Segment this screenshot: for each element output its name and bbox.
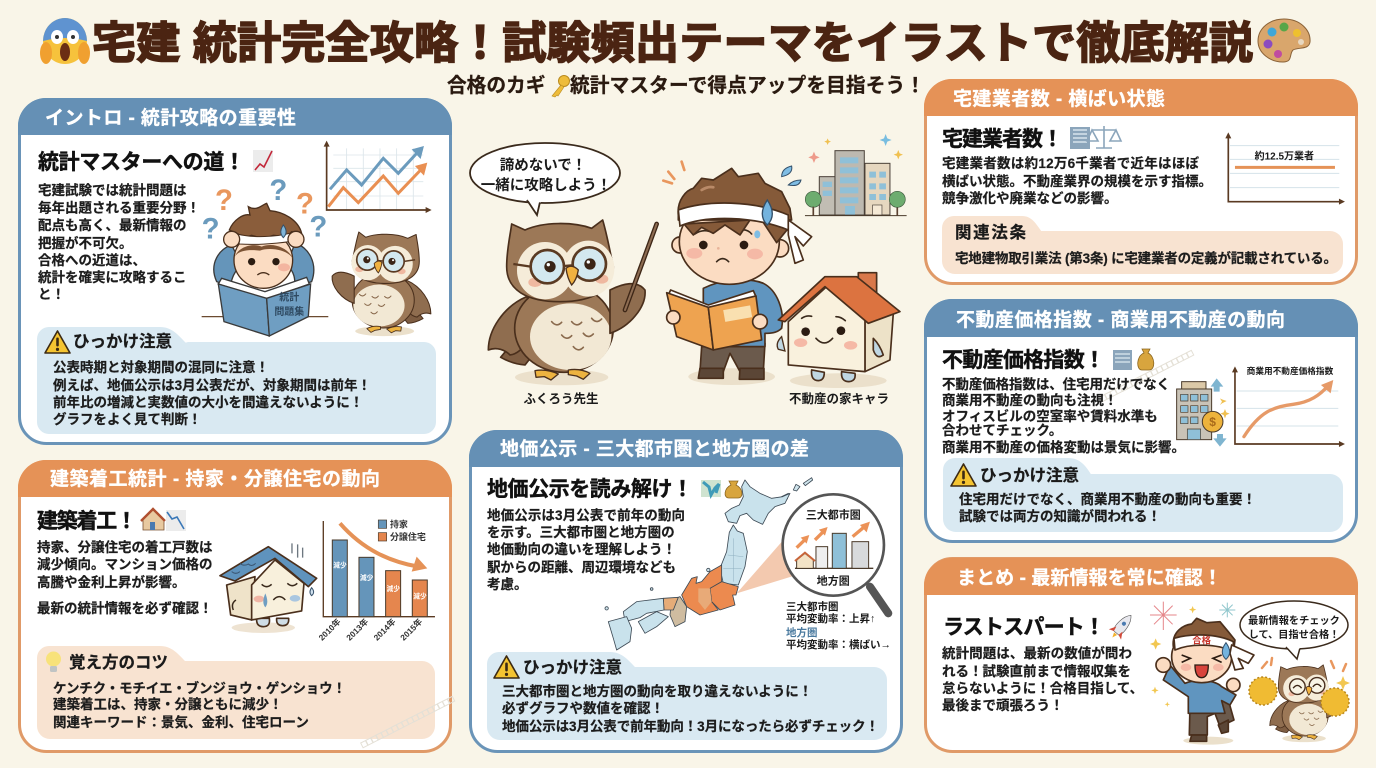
- header: price index: [924, 299, 1358, 337]
- text block: 毎年出題される重要分野！: [38, 200, 200, 216]
- panel: price index: [924, 299, 1358, 542]
- callout: caution: 公表時期と対象期間の混同に注意！: [53, 359, 269, 375]
- callout: related law: 関連法条: [955, 222, 1026, 242]
- text block: 最新の統計情報を必ず確認！: [37, 600, 212, 616]
- text block: 配点も高く、最新情報の: [38, 217, 186, 233]
- header: intro: イントロ - 統計攻略の重要性: [45, 106, 296, 129]
- callout: caution: 試験では両方の知識が問われる！: [959, 508, 1161, 524]
- callout: caution: グラフをよく見て判断！: [53, 411, 202, 427]
- center characters: [470, 134, 907, 406]
- bar chart: 2013年: [344, 616, 370, 643]
- text block: 把握が不可欠。: [38, 235, 132, 251]
- text block: を示す。三大都市圏と地方圏の: [487, 524, 675, 540]
- header: construction: [18, 460, 452, 497]
- callout: caution: [37, 327, 436, 434]
- speech bubble: 一緒に攻略しよう！: [481, 176, 611, 194]
- heading: ラストスパート！: [943, 616, 1105, 639]
- panel: construction: [18, 460, 452, 752]
- panel: summary: [924, 558, 1358, 752]
- callout: caution: 三大都市圏と地方圏の動向を取り違えないように！: [502, 683, 812, 699]
- text: rates: 平均変動率：横ばい→: [786, 638, 891, 651]
- text block: 競争激化や廃業などの影響。: [942, 190, 1118, 206]
- icon: chart up: [253, 150, 273, 172]
- bar chart: [316, 518, 435, 643]
- speech bubble: 諦めないで！: [500, 157, 586, 174]
- text block: オフィスビルの空室率や賃料水準も: [942, 408, 1158, 424]
- text block: 怠らないように！合格目指して、: [942, 680, 1143, 696]
- header: agents: 宅建業者数 - 横ばい状態: [953, 87, 1165, 110]
- illustration: cheering student: [1150, 602, 1254, 745]
- icon: key: [552, 76, 570, 97]
- title: 宅建 統計完全攻略！試験頻出テーマをイラストで徹底解説: [92, 19, 1253, 68]
- text block: 統計を確実に攻略するこ: [38, 269, 186, 285]
- line chart: 約12.5万業者: [1255, 149, 1314, 162]
- illustration: worried student: ?: [215, 184, 233, 217]
- icon: building: [1113, 350, 1132, 370]
- magnifier: [783, 494, 888, 613]
- bar chart: 分譲住宅: [390, 531, 426, 542]
- header: land price: 地価公示 - 三大都市圏と地方圏の差: [500, 437, 809, 460]
- text: rates: 三大都市圏: [786, 600, 838, 613]
- panel: intro: [18, 98, 452, 444]
- callout: memory tip: 関連キーワード：景気、金利、住宅ローン: [53, 714, 309, 730]
- icon: money bag: [1138, 349, 1154, 370]
- illustration: worried student: 問題集: [274, 305, 304, 318]
- bar chart: 2010年: [316, 616, 343, 643]
- illustration: office building and coin: [1177, 378, 1230, 447]
- callout: memory tip: 建築着工は、持家・分譲ともに減少！: [53, 696, 282, 712]
- text block: 駅からの距離、周辺環境なども: [487, 559, 676, 575]
- callout: memory tip: [37, 646, 435, 739]
- illustration: worried student: ?: [309, 211, 327, 244]
- text block: 合わせてチェック。: [942, 423, 1062, 438]
- label: 不動産の家キャラ: [789, 391, 889, 406]
- text block: 商業用不動産の動向も注視！: [942, 392, 1118, 408]
- line chart: 商業用不動産価格指数: [1247, 365, 1334, 376]
- speech bubble: [1240, 601, 1348, 659]
- line chart: [1225, 132, 1345, 205]
- header: summary: [924, 558, 1358, 595]
- subtitle: 合格のカギ: [447, 75, 545, 97]
- text block: 減少傾向。マンション価格の: [37, 556, 212, 572]
- bar chart: 持家: [390, 518, 408, 529]
- callout: related law: 宅地建物取引業法 (第3条) に宅建業者の定義が記載されている。: [955, 250, 1337, 266]
- illustration: owl: [332, 232, 431, 336]
- icon: bulb: [46, 652, 61, 672]
- heading: 統計マスターへの道！: [38, 151, 245, 174]
- illustration: owl teacher: [488, 220, 657, 385]
- speech bubble: して、目指せ合格！: [1249, 628, 1339, 641]
- illustration: sad house: [220, 543, 317, 633]
- icon: chart down: [166, 510, 186, 531]
- icon: building: [1070, 127, 1090, 149]
- callout: related law: [942, 216, 1343, 274]
- panel: agents: [924, 79, 1358, 284]
- bar chart: 減少: [413, 591, 427, 600]
- callout: caution: 例えば、地価公示は3月公表だが、対象期間は前年！: [53, 377, 371, 393]
- illustration: worried student: ?: [202, 212, 220, 245]
- speech bubble: [470, 143, 620, 215]
- watermark: □□□□□□□□□□□□□□□□□□: [1098, 348, 1196, 405]
- text block: 宅建試験では統計問題は: [38, 182, 187, 198]
- icon: scales: [1087, 126, 1121, 148]
- header: intro: [18, 98, 452, 135]
- text block: れる！試験直前まで情報収集を: [942, 663, 1131, 679]
- callout: caution: ひっかけ注意: [73, 332, 172, 351]
- illustration: worried student: [202, 174, 328, 336]
- watermark: □□□□□□□□□□□□□□□□□□: [359, 694, 457, 751]
- text block: 宅建業者数は約12万6千業者で近年はほぼ: [942, 155, 1200, 171]
- text: rates: [786, 600, 891, 651]
- callout: caution: ひっかけ注意: [523, 658, 622, 677]
- icon: house: [141, 509, 165, 530]
- header: land price: [469, 430, 903, 467]
- header: summary: まとめ - 最新情報を常に確認！: [957, 567, 1222, 589]
- heading: 建築着工！: [37, 510, 137, 533]
- callout: caution: [487, 652, 887, 740]
- header: construction: 建築着工統計 - 持家・分譲住宅の動向: [50, 467, 380, 490]
- callout: caution: 必ずグラフや数値を確認！: [502, 700, 664, 716]
- illustration: office building and coin: $: [1209, 415, 1216, 429]
- icon: map: [701, 480, 721, 497]
- subtitle: 統計マスターで得点アップを目指そう！: [570, 74, 925, 97]
- text block: 持家、分譲住宅の着工戸数は: [37, 539, 213, 555]
- text block: 統計問題は、最新の数値が問わ: [942, 645, 1132, 661]
- text block: 横ばい状態。不動産業界の規模を示す指標。: [942, 173, 1212, 189]
- text block: と！: [38, 287, 65, 302]
- icon: rocket: [1106, 610, 1137, 643]
- illustration: worried student: 統計: [279, 291, 299, 304]
- bar chart: 減少: [360, 573, 374, 582]
- illustration: house character: [777, 273, 900, 388]
- callout: caution: [943, 458, 1343, 532]
- heading: 地価公示を読み解け！: [487, 478, 693, 501]
- header: price index: 不動産価格指数 - 商業用不動産の動向: [956, 309, 1285, 331]
- bar chart: 減少: [333, 560, 347, 569]
- callout: caution: 前年比の増減と実数値の大小を間違えないように！: [53, 394, 363, 410]
- panel: land price: [469, 430, 903, 752]
- illustration: worried student: ?: [269, 174, 287, 207]
- line chart: [1232, 365, 1345, 447]
- magnifier: 三大都市圏: [806, 507, 861, 521]
- map of Japan: [605, 478, 813, 650]
- text block: 合格への近道は、: [38, 252, 146, 268]
- bar chart: 減少: [387, 584, 400, 593]
- text block: 最後まで頑張ろう！: [942, 697, 1064, 713]
- illustration: cheering owl: [1249, 658, 1350, 742]
- illustration: city: [805, 134, 907, 216]
- magnifier: 地方圏: [817, 573, 850, 587]
- callout: caution: ひっかけ注意: [980, 466, 1080, 485]
- icon: screaming face: [40, 18, 90, 64]
- callout: caution: 住宅用だけでなく、商業用不動産の動向も重要！: [959, 491, 1256, 507]
- callout: memory tip: 覚え方のコツ: [69, 652, 168, 672]
- heading: 不動産価格指数！: [942, 349, 1105, 372]
- line chart: [324, 141, 432, 213]
- bar chart: 2014年: [371, 616, 398, 643]
- bar chart: 2015年: [398, 616, 424, 643]
- illustration: worried student: ?: [296, 187, 314, 220]
- text block: 不動産価格指数は、住宅用だけでなく: [942, 376, 1170, 392]
- text block: 考慮。: [487, 577, 528, 592]
- text block: 商業用不動産の価格変動は景気に影響。: [942, 439, 1185, 455]
- label: ふくろう先生: [523, 391, 599, 406]
- header: agents: [924, 79, 1358, 116]
- callout: caution: 地価公示は3月公表で前年動向！3月になったら必ずチェック！: [502, 718, 879, 734]
- illustration: cheering student: 合格: [1192, 635, 1212, 646]
- heading: 宅建業者数！: [942, 128, 1063, 151]
- text: rates: 地方圏: [786, 626, 818, 639]
- text: rates: 平均変動率：上昇↑: [786, 612, 875, 625]
- icon: palette: [1258, 19, 1310, 62]
- text block: 地価動向の違いを理解しよう！: [487, 541, 676, 557]
- illustration: student with book: [663, 162, 812, 385]
- text block: 地価公示は3月公表で前年の動向: [487, 507, 685, 523]
- callout: memory tip: ケンチク・モチイエ・ブンジョウ・ゲンショウ！: [53, 680, 346, 696]
- text block: 高騰や金利上昇が影響。: [37, 574, 186, 590]
- speech bubble: 最新情報をチェック: [1248, 614, 1340, 627]
- icon: money bag: [725, 481, 742, 498]
